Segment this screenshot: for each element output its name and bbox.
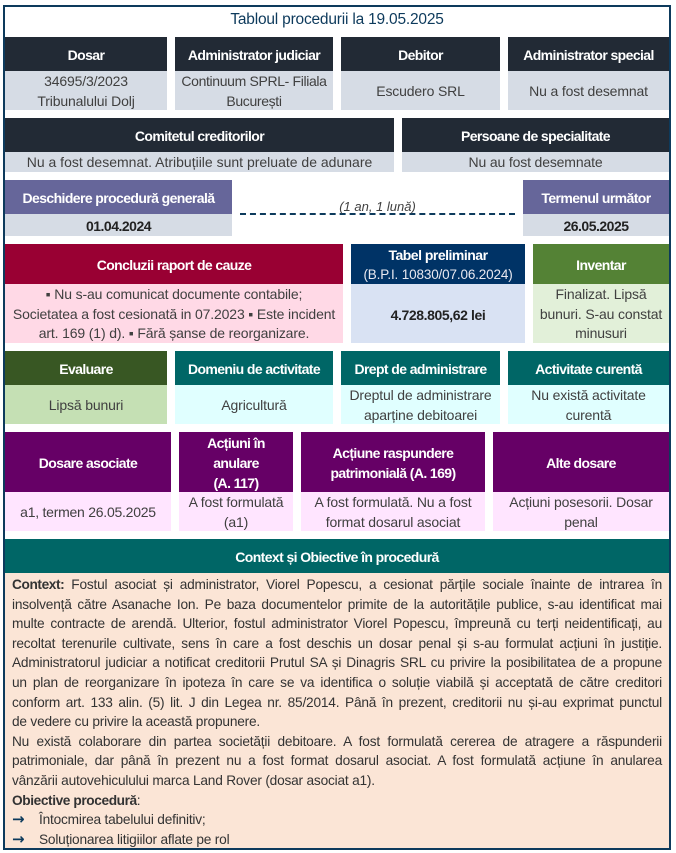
text: conclusions: art. 169 (1) d). ▪ Fără șanse de reorganizare. <box>39 325 309 341</box>
panel: Administrator special <box>508 37 669 110</box>
value: Inventar: bunuri. S-au constat <box>540 306 662 322</box>
heading: Acțiune raspundere patrimonială: patrimonială (A. 169) <box>330 465 456 481</box>
value: Evaluare: Lipsă bunuri <box>49 397 123 413</box>
heading: Acțiuni în anulare: Acțiuni în <box>207 435 265 451</box>
panel: context text: Administratorul judiciar a notificat creditorii Prutul SA și Dinagris SRL cu privire la posibilitatea de a propune <box>12 655 662 670</box>
panel: context text: de vedere cu privire la această propunere. <box>12 714 260 729</box>
panel: context text: Obiective procedură: <box>12 793 140 808</box>
text: conclusions: Societatea a fost cesionată in 07.2023 ▪ Este incident <box>13 306 335 322</box>
value: Dosare asociate: a1, termen 26.05.2025 <box>20 504 156 520</box>
value: next term date: 26.05.2025 <box>563 218 629 234</box>
panel: context text: recoltat terenurile cultivate, sens în care a fost deschis un dosar penal și s-au formulat acțiuni în justiție. <box>12 636 662 651</box>
panel: Deschidere procedură generală <box>5 180 232 236</box>
panel: context text: → <box>12 830 25 848</box>
value: Debitor: Escudero SRL <box>376 83 465 99</box>
heading: Acțiune raspundere patrimonială: Acțiune raspundere <box>333 445 453 461</box>
panel: Alte dosare <box>493 432 669 531</box>
heading: Inventar <box>533 244 669 284</box>
heading: Concluzii raport de cauze: Concluzii raport de cauze <box>97 257 251 273</box>
panel: context text <box>5 573 669 848</box>
value: Debitor <box>341 71 500 110</box>
heading: Administrator judiciar <box>175 37 333 71</box>
heading: Termenul următor <box>523 180 669 214</box>
panel: Termenul următor <box>523 180 669 236</box>
value: total claims <box>351 284 525 343</box>
heading: Deschidere procedură generală: Deschidere procedură generală <box>23 190 214 206</box>
value: Alte dosare: Acțiuni posesorii. Dosar <box>509 494 653 510</box>
heading: Persoane de specialitate <box>402 118 669 152</box>
heading: Tabel preliminar <box>351 244 525 284</box>
heading: Dosar: Dosar <box>68 47 104 63</box>
heading: Termenul următor: Termenul următor <box>541 190 651 206</box>
value: Activitate curentă: Nu există activitate <box>531 387 646 403</box>
value: Activitate curentă <box>508 385 669 424</box>
heading: Administrator special <box>508 37 669 71</box>
value: Administrator judiciar: Continuum SPRL- Filiala <box>181 73 327 89</box>
panel: Drept de administrare <box>341 351 500 424</box>
panel: Evaluare <box>5 351 167 424</box>
value: Drept de administrare: aparține debitoarei <box>364 406 477 422</box>
heading: Persoane de specialitate: Persoane de specialitate <box>461 128 610 144</box>
heading: Acțiuni în anulare <box>179 432 293 492</box>
value: Persoane de specialitate: Nu au fost desemnate <box>468 154 602 170</box>
heading: Administrator special: Administrator special <box>523 47 654 63</box>
heading: Acțiuni în anulare: anulare <box>213 455 259 471</box>
title: Tabloul procedurii la 19.05.2025 <box>230 11 444 28</box>
value: Drept de administrare: Dreptul de administrare <box>349 387 492 403</box>
timeline arrow: dashed connector <box>240 213 515 215</box>
heading: Inventar: Inventar <box>576 257 626 273</box>
value: Administrator special <box>508 71 669 110</box>
heading: Comitetul creditorilor: Comitetul creditorilor <box>135 128 264 144</box>
value: next term date <box>523 214 669 236</box>
panel: Acțiune raspundere patrimonială <box>301 432 485 531</box>
panel: Concluzii raport de cauze <box>5 244 343 343</box>
panel: context text: patrimoniale, dar până în prezent nu a fost format dosarul asociat. A fost formulată acțiune în anularea <box>12 753 662 768</box>
value: Acțiune raspundere patrimonială: A fost formulată. Nu a fost <box>314 494 472 510</box>
heading: Administrator judiciar: Administrator judiciar <box>188 47 320 63</box>
panel: Dosare asociate <box>5 432 171 531</box>
value: Comitetul creditorilor: Nu a fost desemnat. Atribuțiile sunt preluate de adunare <box>27 154 372 170</box>
value: Dosar <box>5 71 167 110</box>
panel: context text: un plan de reorganizare în ipoteza în care se va identifica o soluție viabilă și acceptată de către creditori <box>12 675 662 690</box>
value: Acțiuni în anulare <box>179 492 293 531</box>
text: conclusions: ▪ Nu s-au comunicat documente contabile; <box>46 286 302 302</box>
panel: context text: → <box>12 810 25 828</box>
heading: Drept de administrare <box>341 351 500 385</box>
value: Acțiune raspundere patrimonială <box>301 492 485 531</box>
value: Alte dosare <box>493 492 669 531</box>
panel: Comitetul creditorilor <box>5 118 394 172</box>
heading: Alte dosare <box>493 432 669 492</box>
heading: Dosar <box>5 37 167 71</box>
panel: Administrator judiciar <box>175 37 333 110</box>
heading: Activitate curentă: Activitate curentă <box>535 361 642 377</box>
panel: context text: multe contracte de arendă. Ulterior, fostul administrator Viorel Popescu, împreună cu terți neidentificați, au <box>12 616 662 631</box>
panel: Activitate curentă <box>508 351 669 424</box>
value: date opened: 01.04.2024 <box>86 218 151 234</box>
text: conclusions <box>5 284 343 343</box>
value: Acțiuni în anulare: (a1) <box>224 514 248 530</box>
panel: context text: Context: Fostul asociat și administrator, Viorel Popescu, a cesionat părțile sociale înainte de intrarea în <box>12 577 662 592</box>
panel: Domeniu de activitate <box>175 351 333 424</box>
value: Dosare asociate <box>5 492 171 531</box>
panel: Persoane de specialitate <box>402 118 669 172</box>
value: Activitate curentă: curentă <box>566 406 611 422</box>
value: Inventar <box>533 284 669 343</box>
heading: Tabel preliminar: (B.P.I. 10830/07.06.2024) <box>363 266 513 282</box>
heading: Alte dosare: Alte dosare <box>546 455 616 471</box>
value: Drept de administrare <box>341 385 500 424</box>
value: Alte dosare: penal <box>564 514 598 530</box>
value: total claims: 4.728.805,62 lei <box>391 306 485 322</box>
heading: Comitetul creditorilor <box>5 118 394 152</box>
heading: Domeniu de activitate: Domeniu de activitate <box>188 361 320 377</box>
value: Administrator judiciar: București <box>226 92 282 108</box>
value: date opened <box>5 214 232 236</box>
panel: Debitor <box>341 37 500 110</box>
heading: Context și Obiective în procedură <box>5 539 669 573</box>
value: Inventar: Finalizat. Lipsă <box>556 286 646 302</box>
value: Dosar: Tribunalului Dolj <box>37 92 135 108</box>
panel: context text: insolvență către Asanache Ion. Pe baza documentelor primite de la autoritățile publice, s-au identificat mai <box>12 597 662 612</box>
heading: Acțiuni în anulare: (A. 117) <box>214 475 258 491</box>
heading: Dosare asociate <box>5 432 171 492</box>
value: Dosar: 34695/3/2023 <box>44 73 128 89</box>
heading: Debitor: Debitor <box>398 47 443 63</box>
panel: context text: Întocmirea tabelului definitiv; <box>39 812 206 827</box>
heading: Evaluare <box>5 351 167 385</box>
heading: Activitate curentă <box>508 351 669 385</box>
heading: Context și Obiective în procedură: Context și Obiective în procedură <box>235 549 439 565</box>
heading: Concluzii raport de cauze <box>5 244 343 284</box>
value: Persoane de specialitate <box>402 152 669 172</box>
heading: Dosare asociate: Dosare asociate <box>39 455 137 471</box>
heading: Tabel preliminar: Tabel preliminar <box>388 246 488 262</box>
heading: Drept de administrare: Drept de administrare <box>354 361 487 377</box>
value: Acțiune raspundere patrimonială: format dosarul asociat <box>326 514 460 530</box>
value: Administrator special: Nu a fost desemnat <box>529 83 648 99</box>
heading: Domeniu de activitate <box>175 351 333 385</box>
value: Inventar: minusuri <box>575 325 627 341</box>
panel: Tabel preliminar <box>351 244 525 343</box>
heading: Acțiune raspundere patrimonială <box>301 432 485 492</box>
duration label: (1 an, 1 lună) <box>339 198 416 214</box>
panel: Inventar <box>533 244 669 343</box>
value: Acțiuni în anulare: A fost formulată <box>189 494 283 510</box>
value: Domeniu de activitate <box>175 385 333 424</box>
panel: Dosar <box>5 37 167 110</box>
panel: context text: Nu există colaborare din partea societății debitoare. A fost formulată cererea de atragere a răspunderii <box>12 734 662 749</box>
panel: context text: conform art. 133 alin. (5) lit. J din Legea nr. 85/2014. Până în prezent, creditorii nu și-au exprimat punctul <box>12 695 662 710</box>
panel: context text: Soluționarea litigiilor aflate pe rol <box>39 832 229 847</box>
heading: Deschidere procedură generală <box>5 180 232 214</box>
heading: Debitor <box>341 37 500 71</box>
value: Evaluare <box>5 385 167 424</box>
panel: context text: vânzării autovehiculului marca Land Rover (dosar asociat a1). <box>12 773 375 788</box>
value: Administrator judiciar <box>175 71 333 110</box>
value: Domeniu de activitate: Agricultură <box>221 397 287 413</box>
panel: Acțiuni în anulare <box>179 432 293 531</box>
heading: Evaluare: Evaluare <box>59 361 113 377</box>
